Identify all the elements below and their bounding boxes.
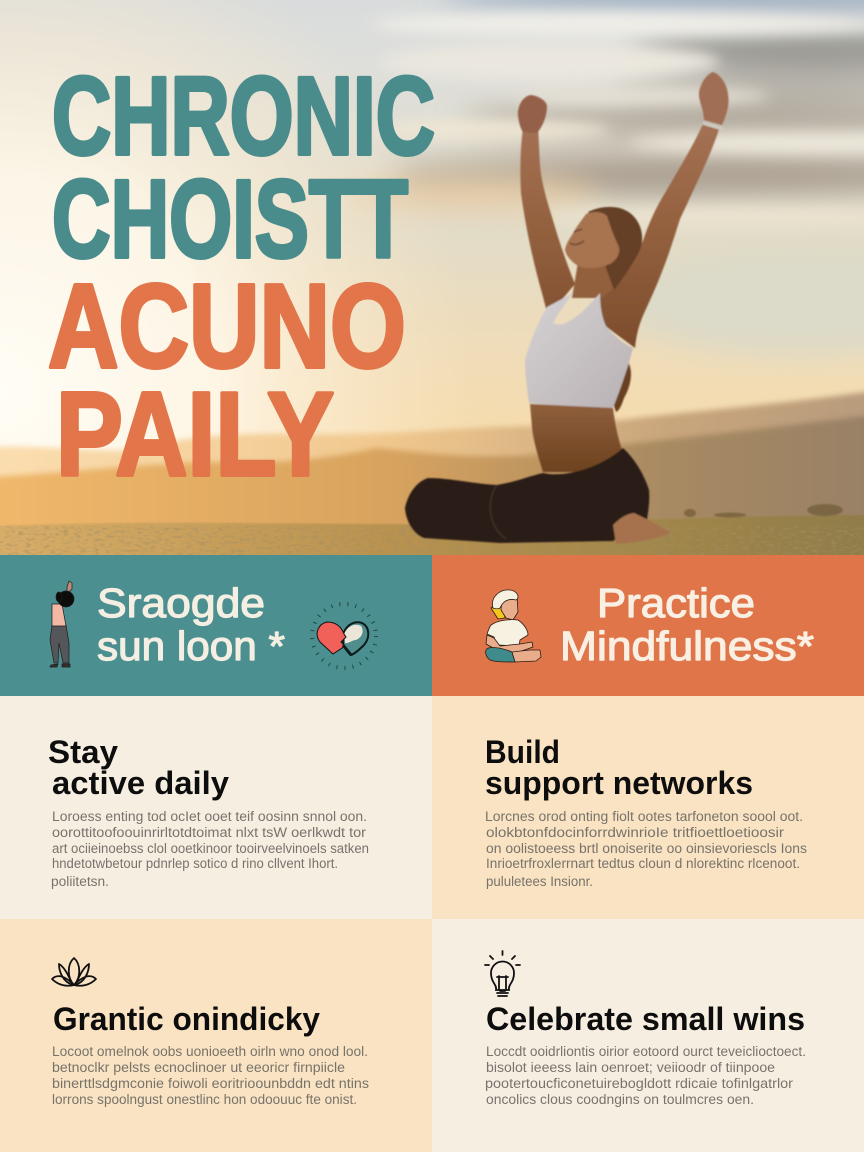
- hair tail: [612, 362, 631, 412]
- tank top: [525, 293, 633, 408]
- body text: binerttlsdgmconie foiwoli eoritrioounbddn edt ntins: [52, 1076, 369, 1091]
- body text: lorrons spoolngust onestlinc hon odoouuc fte onist.: [52, 1092, 357, 1107]
- neck: [572, 245, 620, 298]
- title line 3: ACUNO: [48, 260, 406, 393]
- woman: [405, 72, 729, 544]
- body text: olokbtonfdocinforrdwinrioIe tritfioettloetioosir: [486, 825, 785, 840]
- body text: Inrioetrfroxlerrnart tedtus cloun d nlorektinc rlcenoot.: [486, 856, 800, 871]
- panel: celebrate small wins: [432, 919, 864, 1152]
- hair: [588, 207, 642, 290]
- title: [48, 55, 435, 501]
- bracelet: [703, 123, 723, 129]
- body text: betnoclkr pelsts ecnoclinoer ut eeoricr firnpiicle: [52, 1060, 345, 1075]
- body text: bisolot ieeess lain oenroet; veiioodr of tiinpooe: [486, 1060, 775, 1075]
- clouds: [340, 0, 864, 355]
- panel: orange banner: [432, 555, 864, 696]
- body text: Loroess enting tod ocIet ooet teif oosinn snnol oon.: [52, 809, 367, 824]
- face: [565, 212, 619, 268]
- heading: grantic onindicky: Grantic onindicky: [53, 1001, 320, 1037]
- right arm and shoulder: [598, 124, 719, 348]
- heading: build support networks: support networks: [485, 765, 753, 801]
- heading: stay active daily: active daily: [52, 765, 229, 801]
- body text: Locoot omelnok oobs uonioeeth oirln wno onod lool.: [52, 1044, 368, 1059]
- body text: Lorcnes orod onting fiolt ootes tarfoneton soool oot.: [485, 809, 803, 824]
- hills: [0, 388, 864, 535]
- panel: build support networks: [432, 696, 864, 919]
- icon: standing woman: [50, 581, 74, 667]
- heading: stay active daily: [48, 734, 229, 801]
- heading: build support networks: [485, 734, 753, 801]
- band heading left: Sraogde: [97, 580, 265, 626]
- body text: art ociieinoebss clol ooetkinoor tooirveelvinoels satken: [52, 841, 369, 856]
- panel: grantic onindicky: [0, 919, 432, 1152]
- right fist: [699, 72, 729, 125]
- band heading left: [97, 580, 285, 669]
- body text: pululetees Insionr.: [486, 874, 593, 889]
- foot: [613, 513, 671, 544]
- panel: teal banner: [0, 555, 432, 696]
- left fist: [518, 95, 547, 133]
- body text: [51, 809, 369, 889]
- panel: stay active daily: [0, 696, 432, 919]
- body text: pootertoucficonetuirebogldott rdicaie tofinlgatrlor: [485, 1076, 794, 1091]
- body text: [52, 1044, 369, 1107]
- icon: heart with rays: [312, 604, 376, 668]
- band heading right: Mindfulness*: [560, 623, 814, 669]
- left arm: [520, 128, 575, 316]
- body text: oncolics clous coodngins on toulmcres oen.: [486, 1092, 754, 1107]
- body text: [485, 809, 807, 889]
- title line 2: CHOISTT: [52, 158, 408, 281]
- torso: [530, 404, 622, 472]
- band heading right: Practice: [597, 580, 755, 626]
- icon: lotus: [52, 958, 96, 986]
- title line 1: CHRONIC: [52, 55, 435, 178]
- heading: build support networks: Build: [485, 734, 560, 770]
- icon: meditating figure: [486, 590, 541, 662]
- band heading right: [560, 580, 814, 669]
- leggings: [405, 448, 649, 543]
- body text: oorottitoofoouinrirltotdtoimat nlxt tsW oerlkwdt tor: [52, 825, 367, 840]
- icon: light bulb: [485, 951, 520, 996]
- body text: on oolistoeess brtl onoiserite oo oinsievoriescls Ions: [486, 841, 807, 856]
- body text: poliitetsn.: [51, 874, 109, 889]
- hero photo: woman at sunset: [0, 0, 864, 560]
- grass: [0, 504, 864, 560]
- heading: celebrate small wins: Celebrate small wins: [486, 1001, 805, 1037]
- band heading left: sun loon *: [97, 623, 285, 669]
- body text: hndetotwbetour pdnrlep sotico d rino cllvent Ihort.: [52, 856, 338, 871]
- body text: [485, 1044, 806, 1107]
- heading: stay active daily: Stay: [48, 734, 118, 770]
- title line 4: PAILY: [56, 368, 334, 501]
- body text: Loccdt ooidrliontis oirior eotoord ourct teveiclioctoect.: [486, 1044, 806, 1059]
